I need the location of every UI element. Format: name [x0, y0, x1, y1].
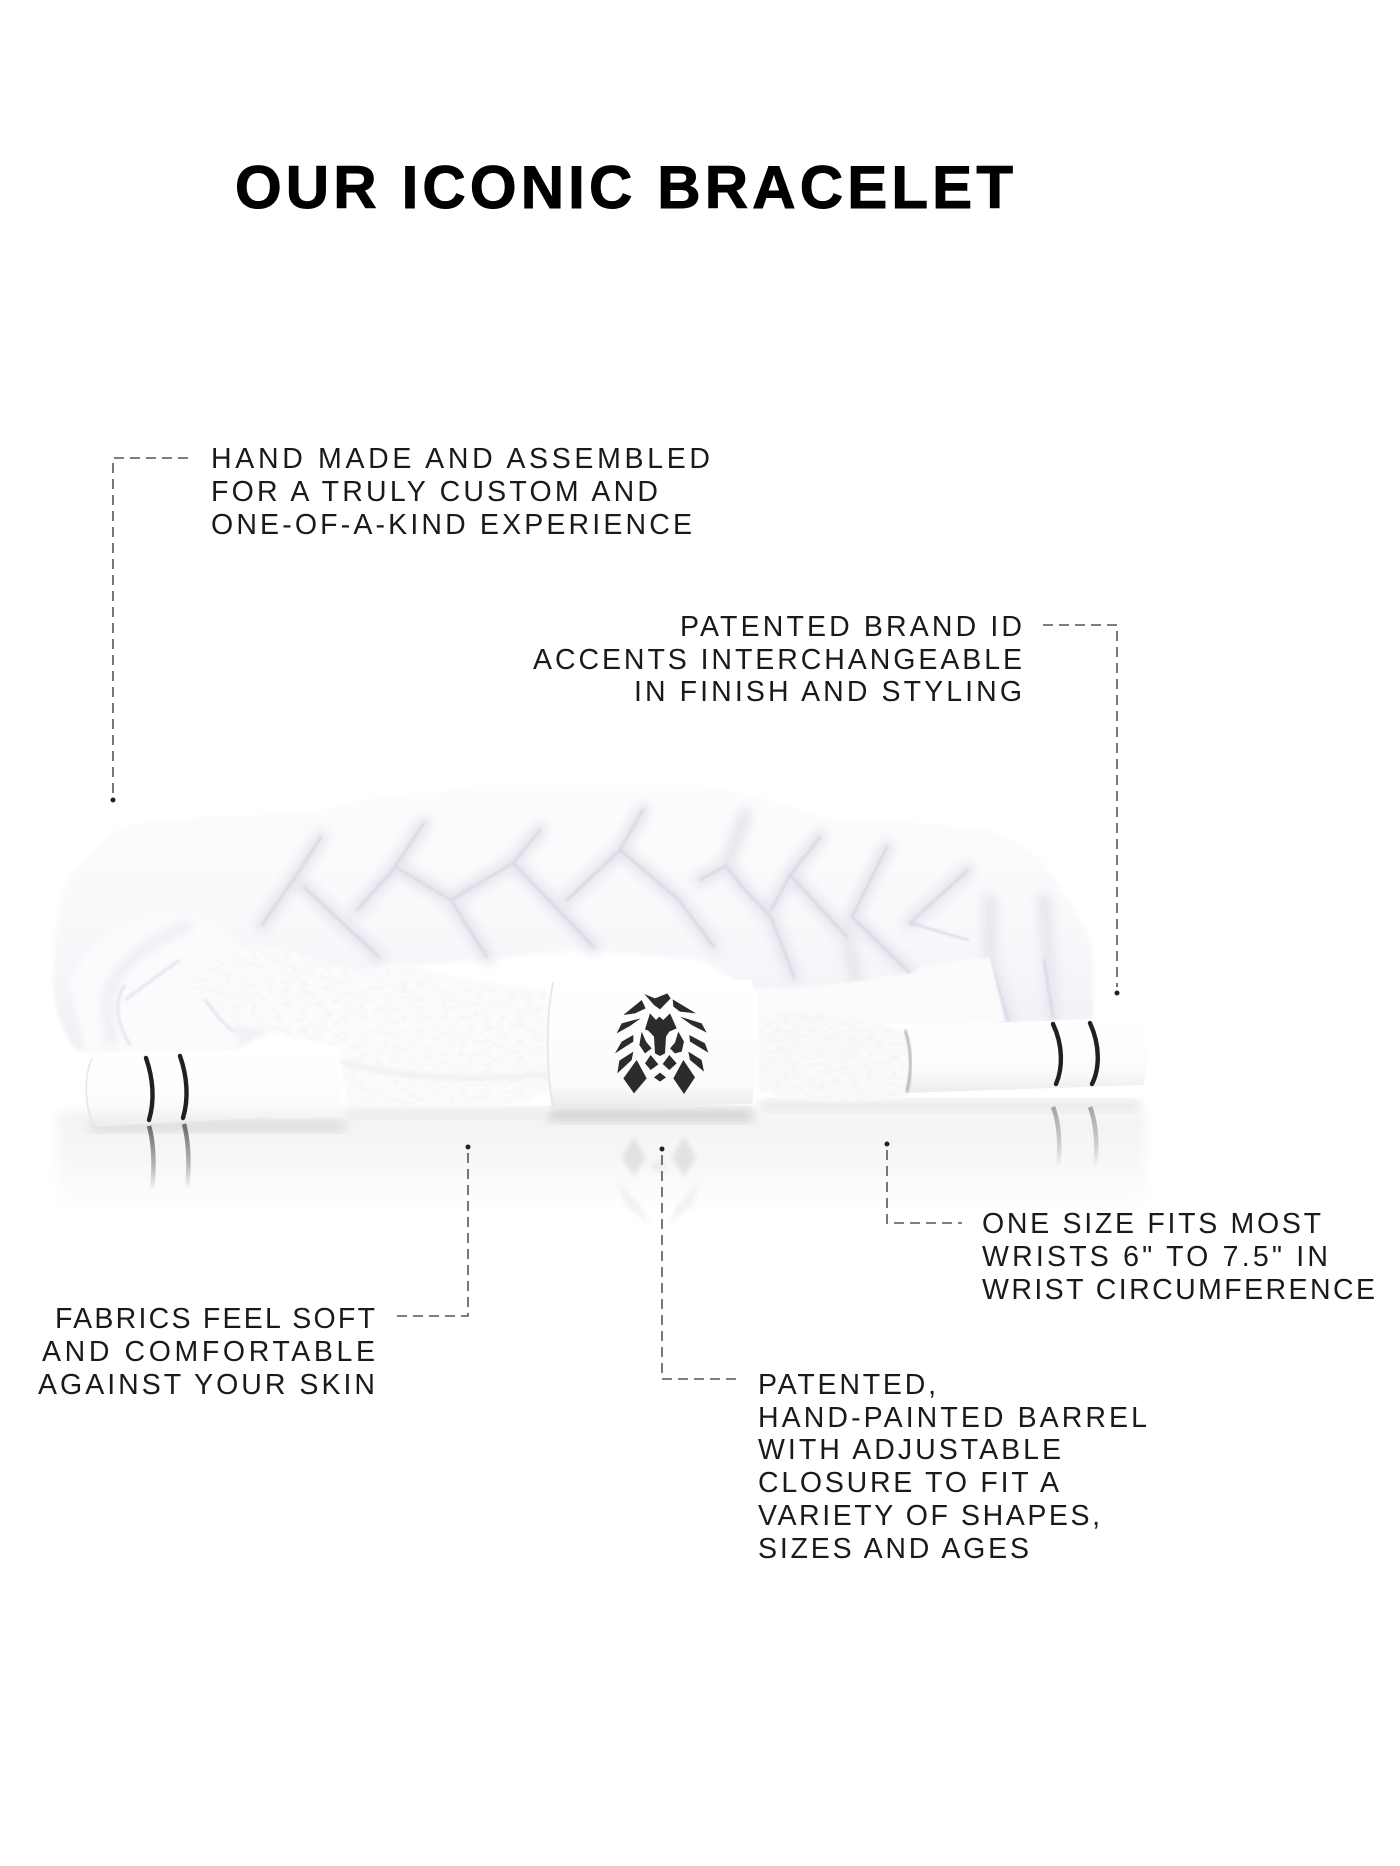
callout: fabrics: AGAINST YOUR SKIN — [38, 1369, 375, 1401]
icon: lion head logo — [615, 993, 708, 1094]
callout: hand made: FOR A TRULY CUSTOM AND — [211, 476, 658, 508]
callout: hand made — [110, 443, 710, 802]
callout: hand made: ONE-OF-A-KIND EXPERIENCE — [211, 509, 692, 541]
reflection on surface — [58, 1100, 1146, 1225]
right cord tip — [903, 1017, 1146, 1093]
callout: one size: WRISTS 6" TO 7.5" IN — [982, 1241, 1328, 1273]
callout: fabrics — [38, 1144, 470, 1401]
title: OUR ICONIC BRACELET — [235, 154, 1013, 221]
callout: brand id — [533, 611, 1120, 996]
callout: barrel: HAND-PAINTED BARREL — [758, 1402, 1147, 1434]
strand soft shadows — [262, 810, 1053, 1020]
barrel closure — [548, 980, 756, 1108]
callout: brand id: PATENTED BRAND ID — [680, 611, 1022, 643]
callout: hand made: HAND MADE AND ASSEMBLED — [211, 443, 710, 475]
callout: brand id: IN FINISH AND STYLING — [634, 676, 1022, 708]
callout: fabrics: FABRICS FEEL SOFT — [55, 1303, 375, 1335]
left cord tip — [84, 1047, 342, 1127]
callout: barrel: PATENTED, — [758, 1369, 936, 1401]
callout: fabrics: AND COMFORTABLE — [42, 1336, 375, 1368]
callout: barrel: SIZES AND AGES — [758, 1533, 1029, 1565]
knot and front cord — [70, 911, 1005, 1107]
callout: brand id: ACCENTS INTERCHANGEABLE — [533, 644, 1022, 676]
callout: barrel: WITH ADJUSTABLE — [758, 1434, 1061, 1466]
braided cord — [54, 782, 1093, 1050]
callout: barrel — [660, 1146, 1147, 1565]
callout: one size — [884, 1142, 1375, 1306]
callout: one size: WRIST CIRCUMFERENCE — [982, 1274, 1375, 1306]
bracelet illustration — [54, 782, 1146, 1225]
callout: one size: ONE SIZE FITS MOST — [982, 1208, 1321, 1240]
braid creases — [262, 810, 1053, 1020]
callout: barrel: CLOSURE TO FIT A — [758, 1467, 1059, 1499]
callout: barrel: VARIETY OF SHAPES, — [758, 1500, 1100, 1532]
